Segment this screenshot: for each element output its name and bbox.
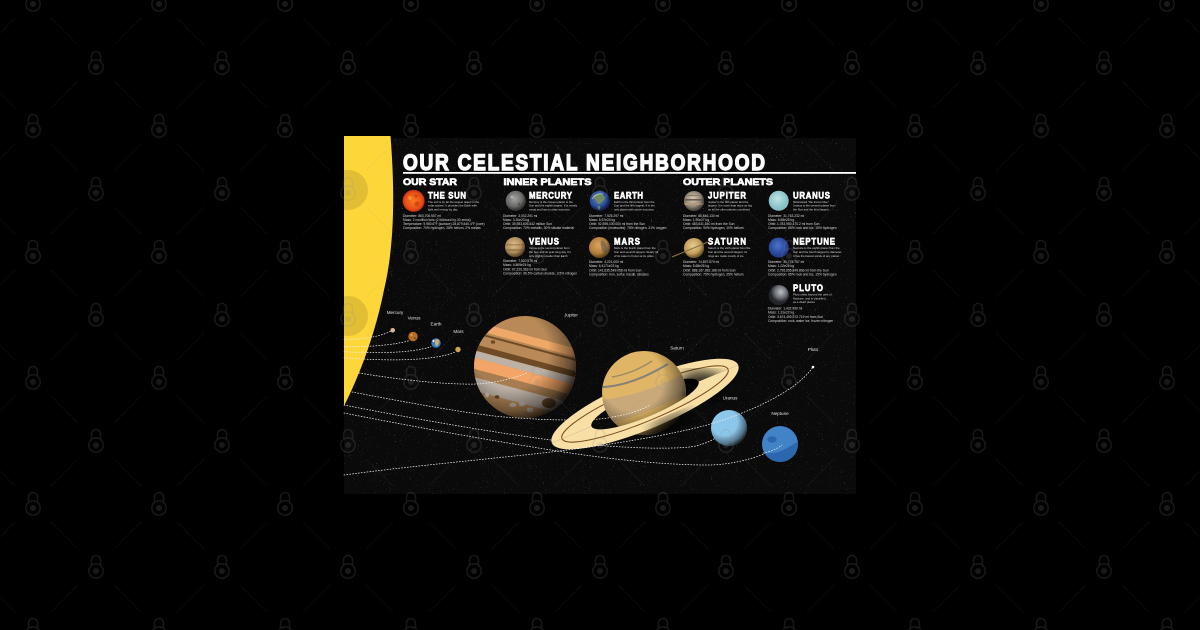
description: largest. It is more than twice as big <box>708 204 752 208</box>
facts: Diameter: 88,846.130 mi <box>683 214 719 218</box>
small planet: pluto <box>812 366 814 368</box>
facts: Diameter: 30,775.757 mi <box>768 260 804 264</box>
facts: Diameter: 4,221.000 mi <box>589 260 624 264</box>
facts: Diameter: 863,706.557 mi <box>403 214 441 218</box>
watermark discs on sun <box>344 170 368 336</box>
description: Sun and the second largest. Its <box>708 250 748 254</box>
description: Venus is the second planet from <box>529 246 570 250</box>
title: OUR CELESTIAL NEIGHBORHOOD <box>403 151 765 175</box>
small planet: mercury <box>390 328 395 333</box>
ring shadow <box>678 371 726 401</box>
description: of its water is frozen at its poles <box>614 254 654 258</box>
facts: Composition: 75% hydrogen, 25% helium <box>683 273 744 277</box>
heading: our star: OUR STAR <box>403 177 457 188</box>
description: Jupiter is the fifth planet and the <box>708 200 749 204</box>
description: Nicknamed "the frozen blue" <box>793 200 829 204</box>
label: mars: Mars <box>453 329 464 334</box>
panel: saturn <box>672 236 751 277</box>
saturn planet <box>551 351 739 450</box>
icon: neptune <box>769 238 789 258</box>
icon: jupiter <box>684 191 704 211</box>
facts: Orbit: 35,983,605.542 million Sun <box>503 222 552 226</box>
facts: Mass: 6.4171e23 kg <box>589 264 619 268</box>
facts: Mass: 3.30e23 kg <box>503 218 529 222</box>
description: Saturn is the sixth planet from the <box>708 246 751 250</box>
heading: MERCURY <box>529 190 572 201</box>
heading: THE SUN <box>428 190 466 201</box>
panel: pluto <box>768 282 833 323</box>
heading: EARTH <box>614 190 643 201</box>
facts: Diameter: 1,432.990 mi <box>768 306 803 310</box>
heading: MARS <box>614 236 640 247</box>
ring front shade <box>647 407 697 441</box>
facts: Composition: rock, water ice, frozen nitrogen <box>768 319 833 323</box>
description: Sun and the fifth largest. It is the <box>614 204 655 208</box>
description: Sun and the fourth largest by diameter. <box>793 250 842 254</box>
small planet: venus <box>408 332 418 341</box>
jupiter planet <box>474 316 576 418</box>
panel: venus <box>503 236 577 276</box>
description: It has the fastest winds of any planet <box>793 254 839 258</box>
description: Neptune, and is classified <box>793 296 826 300</box>
orbit paths <box>344 331 782 465</box>
title underline <box>403 172 856 174</box>
facts: Composition: 90% hydrogen, 10% helium <box>683 226 744 230</box>
orbit path: pluto <box>344 367 813 475</box>
description: Neptune is the eighth planet from the <box>793 246 840 250</box>
the sun edge <box>344 136 393 406</box>
facts: Mass: 2 nonillion tons (2 followed by 30 zeros) <box>403 218 471 222</box>
small planet: mars <box>455 347 461 352</box>
label: earth: Earth <box>431 322 442 326</box>
facts: Mass: 1.02e26 kg <box>768 264 794 268</box>
facts: Mass: 1.90e27 kg <box>683 218 709 222</box>
rings front <box>552 365 739 450</box>
facts: Temperature: 9,980.6°F (surface) 28,879,540.4°F (core) <box>403 222 485 226</box>
description: Sun and the eighth largest. It is mostly <box>529 204 578 208</box>
description: Earth is the third planet from the <box>614 200 655 204</box>
orbit over globe <box>612 405 650 417</box>
panel: neptune <box>768 236 842 277</box>
facts: Orbit: 3,674,490,972.719 mi from Sun <box>768 315 823 319</box>
icon: pluto <box>769 285 789 305</box>
description: as a dwarf planet <box>793 300 815 304</box>
facts: Mass: 8.68e25 kg <box>768 218 794 222</box>
label: saturn: Saturn <box>670 346 684 350</box>
heading: URANUS <box>793 190 830 201</box>
heading: VENUS <box>529 236 559 247</box>
description: metal and has no plate tectonics <box>529 207 570 211</box>
neptune planet <box>762 426 798 462</box>
heading: JUPITER <box>708 190 747 201</box>
label: jupiter: Jupiter <box>564 312 578 318</box>
icon: sun <box>403 190 425 212</box>
panel: earth <box>589 190 667 230</box>
facts: Orbit: 483,631,840 mi from the Sun <box>683 222 735 226</box>
heading: NEPTUNE <box>793 236 835 247</box>
label: mercury: Mercury <box>387 310 404 315</box>
rings back <box>551 358 738 443</box>
facts: Diameter: 7,520.576 mi <box>503 259 538 263</box>
label: pluto: Pluto <box>808 347 819 352</box>
facts: Composition: 96.5% carbon dioxide, 3.5% nitrogen <box>503 272 577 276</box>
facts: Orbit: 92,955,100.000 mi from the Sun <box>589 222 645 226</box>
description: rings are made mostly of ice <box>708 254 744 258</box>
icon: mars <box>589 237 610 258</box>
facts: Orbit: 67,220,363 mi from Sun <box>503 267 547 271</box>
facts: Orbit: 888,187,982.186 mi from Sun <box>683 268 736 272</box>
facts: Orbit: 141,635,549.058 mi from Sun <box>589 268 642 272</box>
facts: Mass: 1.31e22 kg <box>768 311 794 315</box>
panel: jupiter <box>683 190 752 230</box>
uranus planet <box>711 410 747 446</box>
facts: Composition: 85% rock and ice, 15% hydrogen <box>768 273 837 277</box>
icon: uranus <box>769 191 789 211</box>
facts: Mass: 5.68e26 kg <box>683 264 709 268</box>
panel: the sun <box>403 190 485 230</box>
panel: uranus <box>768 190 837 230</box>
panel: mercury <box>503 190 578 230</box>
globe <box>600 351 690 435</box>
facts: Orbit: 2,795,655,849.806 mi from the Sun <box>768 268 829 272</box>
description: the Sun and the third largest <box>793 207 829 211</box>
poster background <box>344 138 856 494</box>
facts: Composition: 70% metallic, 30% silicate material <box>503 226 574 230</box>
facts: Diameter: 7,925.297 mi <box>589 214 624 218</box>
panel: mars <box>589 236 658 277</box>
description: light and energy by day. <box>428 207 458 211</box>
facts: Composition: 70% hydrogen, 28% helium, 2% metals <box>403 226 481 230</box>
description: only planet with active tectonics <box>614 207 654 211</box>
facts: Orbit: 1,783,950,470.2 mi from Sun <box>768 222 820 226</box>
facts: Mass: 5.97e24 kg <box>589 218 615 222</box>
description: the Sun and its year-long day. It's <box>529 250 571 254</box>
small planet: earth <box>431 338 441 348</box>
description: Mars is the fourth planet from the <box>614 246 656 250</box>
description: The sun is by far the largest object in the <box>428 200 480 204</box>
description: solar system. It provides the Earth with <box>428 204 477 208</box>
heading: PLUTO <box>793 282 823 293</box>
icon: earth <box>590 191 610 211</box>
facts: Composition: Iron, sulfur, basalt, silicates <box>589 273 649 277</box>
facts: Composition (molecules): 78% nitrogen, 21% oxygen <box>589 226 667 230</box>
facts: Mass: 4.869e24 kg <box>503 263 531 267</box>
heading: inner planets: INNER PLANETS <box>504 177 592 188</box>
facts: Diameter: 3,032.291 mi <box>503 214 538 218</box>
icon: venus <box>504 237 526 257</box>
icon: saturn <box>672 238 708 258</box>
description: Pluto orbits beyond the orbit of <box>793 293 832 297</box>
heading: outer planets: OUTER PLANETS <box>683 177 774 188</box>
heading: SATURN <box>708 236 746 247</box>
facts: Diameter: 31,763.232 mi <box>768 214 804 218</box>
description: as all the other planets combined <box>708 207 750 211</box>
label: uranus: Uranus <box>723 396 738 400</box>
description: Sun and seventh largest. Nearly all <box>614 250 658 254</box>
icon: mercury <box>506 191 526 211</box>
description: only slightly smaller than Earth <box>529 254 568 258</box>
facts: Diameter: 74,897.570 mi <box>683 260 719 264</box>
facts: Composition: 85% rock and ice, 15% hydrogen <box>768 226 837 230</box>
description: Uranus is the seventh planet from <box>793 204 836 208</box>
label: venus: Venus <box>408 316 421 320</box>
label: neptune: Neptune <box>771 411 789 416</box>
description: Mercury is the closest planet to the <box>529 200 573 204</box>
